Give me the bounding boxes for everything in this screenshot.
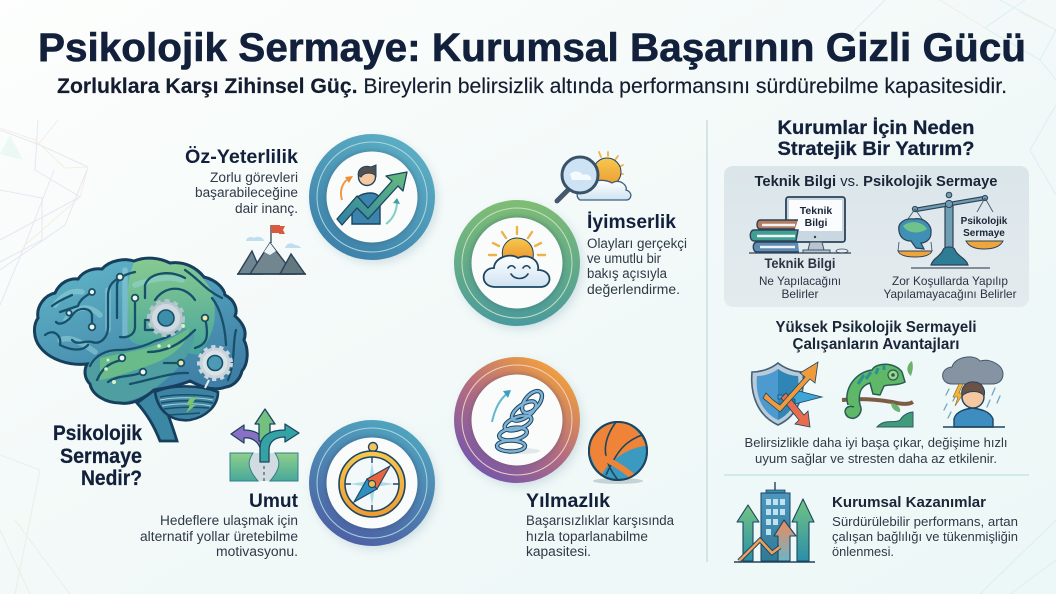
text block: Umut: Hedeflere ulaşmak için [160, 513, 298, 528]
brain circuit lines [45, 270, 236, 384]
subtitle: Zorluklara Karşı Zihinsel Güç. Bireylerin belirsizlik altında performansını sürdürebilme kapasitesidir. [57, 74, 1007, 98]
heading: Psikolojik Sermaye Nedir?: Sermaye [60, 445, 142, 468]
text block: Umut [140, 491, 299, 559]
title: Psikolojik Sermaye: Kurumsal Başarının Gizli Gücü [38, 26, 1026, 70]
text block: Yılmazlık: Başarısızlıklar karşısında [526, 513, 674, 528]
text block: Öz-Yeterlilik: dair inanç. [235, 201, 298, 216]
text block: Kurumsal Kazanımlar: çalışan bağlılığı ve tükenmişliğin [832, 529, 1018, 544]
icon: magnifier with sun and cloud [557, 152, 631, 201]
text block: Yılmazlık: Yılmazlık [526, 491, 610, 512]
icon: computer and books [749, 197, 851, 253]
text block: Öz-Yeterlilik [185, 147, 298, 216]
brain stem [137, 388, 177, 441]
text block: Kurumsal Kazanımlar [832, 494, 1018, 559]
icon: shield with arrows [752, 362, 822, 427]
icon: chameleon [842, 361, 913, 427]
heading: Yüksek Psikolojik Sermayeli [776, 319, 976, 353]
icon: balance scale [898, 192, 1008, 268]
icon: balance scale: Sermaye [963, 228, 1005, 239]
gears [150, 302, 230, 388]
heading: Psikolojik Sermaye Nedir?: Psikolojik [53, 422, 142, 445]
heading: Yüksek Psikolojik Sermayeli: Çalışanların Avantajları [792, 336, 960, 353]
heading: Kurumlar İçin Neden: Stratejik Bir Yatırım? [778, 139, 974, 160]
text block: avantajlar: Belirsizlikle daha iyi başa çıkar, değişime hızlı [744, 435, 1008, 450]
text block: İyimserlik: ve umutlu bir [587, 251, 661, 266]
heading: Yüksek Psikolojik Sermayeli: Yüksek Psikolojik Sermayeli [776, 319, 976, 336]
text block: Kurumsal Kazanımlar: Sürdürülebilir performans, artan [832, 514, 1018, 529]
text block: Yılmazlık: hızla toparlanabilme [526, 529, 648, 544]
text block: Umut: motivasyonu. [216, 544, 298, 559]
icon: compass [339, 442, 405, 517]
text block: Öz-Yeterlilik: Zorlu görevleri [210, 170, 298, 185]
circle: İyimserlik [454, 200, 582, 329]
cerebellum [155, 386, 218, 420]
text block: Öz-Yeterlilik: Öz-Yeterlilik [185, 147, 298, 168]
text block: Umut: Umut [249, 491, 299, 512]
text block: İyimserlik: değerlendirme. [587, 282, 680, 297]
panel: Teknik Bilgi vs Psikolojik Sermaye [724, 166, 1029, 307]
icon: bouncing ball [589, 422, 647, 484]
heading: Kurumlar İçin Neden: Kurumlar İçin Neden [778, 118, 974, 139]
label: Zor Koşullarda [884, 274, 1017, 301]
brain illustration [34, 256, 247, 441]
heading: Psikolojik Sermaye Nedir?: Nedir? [81, 467, 142, 490]
icon: balance scale: Psikolojik [961, 216, 1008, 227]
text block: Umut: alternatif yollar üretebilme [140, 529, 298, 544]
text block: İyimserlik: bakış açısıyla [587, 266, 667, 281]
circle: Öz-Yeterlilik [309, 134, 437, 263]
icon: computer and books: Bilgi [805, 217, 827, 229]
heading: Kurumlar İçin Neden [778, 118, 974, 160]
label: Teknik Bilgi: Ne Yapılacağını [759, 274, 841, 288]
circuit nodes [66, 274, 208, 375]
text block: Kurumsal Kazanımlar: önlenmesi. [832, 544, 894, 559]
icon: computer and books: Teknik [800, 205, 832, 217]
icon: spring [492, 388, 546, 454]
icon: crossroads arrows [230, 409, 299, 481]
label: Zor Koşullarda: Zor Koşullarda Yapılıp [892, 274, 1008, 288]
icon: person under storm cloud [943, 357, 1005, 427]
panel heading: Teknik Bilgi vs. Psikolojik Sermaye [754, 174, 998, 190]
cerebrum outline [34, 258, 247, 403]
text block: Kurumsal Kazanımlar: Kurumsal Kazanımlar [832, 494, 986, 511]
text block: İyimserlik: Olayları gerçekçi [587, 236, 687, 251]
brain light bands [55, 270, 182, 352]
label: Teknik Bilgi: Teknik Bilgi [764, 255, 836, 271]
label: Teknik Bilgi: Belirler [782, 287, 819, 301]
icon: building with rising arrows [734, 482, 815, 562]
text block: İyimserlik [587, 212, 687, 297]
icon: mountain with flag [237, 225, 306, 274]
text block: Yılmazlık [526, 491, 674, 559]
icon: smiling cloud with sun [484, 227, 550, 287]
text block: avantajlar [744, 435, 1008, 466]
text block: Yılmazlık: kapasitesi. [526, 544, 591, 559]
label: Teknik Bilgi [759, 255, 841, 301]
circle: Yılmazlık [454, 357, 582, 486]
heading: Psikolojik Sermaye Nedir? [53, 422, 142, 490]
label: Zor Koşullarda: Yapılamayacağını Belirler [884, 287, 1017, 301]
text block: Öz-Yeterlilik: başarabileceğine [195, 185, 298, 200]
text block: avantajlar: uyum sağlar ve stresten daha az etkilenir. [755, 451, 997, 466]
circle: Umut [309, 420, 437, 549]
icon: person with rising arrow [337, 165, 407, 225]
text block: İyimserlik: İyimserlik [587, 212, 676, 233]
